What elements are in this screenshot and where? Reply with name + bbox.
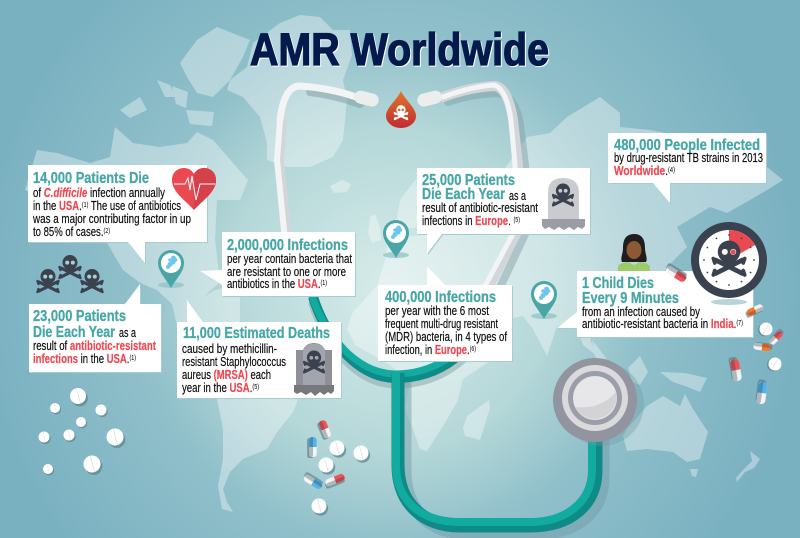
body text: result of antibiotic-resistant xyxy=(422,201,538,215)
body text: of C.difficile infection annually xyxy=(33,186,166,200)
heading: 400,000 Infections xyxy=(385,289,496,306)
body text xyxy=(182,342,286,395)
panel: 23,000 patients die xyxy=(29,284,161,372)
pills: bottom centre xyxy=(303,419,370,516)
heading: 11,000 Estimated Deaths xyxy=(183,325,330,342)
body text: resistant Staphylococcus xyxy=(182,355,286,369)
icon: gravestone xyxy=(294,343,334,396)
icon: heart xyxy=(172,168,216,210)
body text: aureus (MRSA) each xyxy=(182,368,271,382)
body text: (5) xyxy=(252,384,259,391)
teal tubes xyxy=(312,296,596,526)
body text: are resistant to one or more xyxy=(227,265,346,279)
body text: The use of antibiotics xyxy=(88,199,181,213)
body text: infections in Europe. xyxy=(422,214,518,228)
body text xyxy=(614,151,763,178)
map pin: Europe xyxy=(383,220,409,258)
body text: antibiotic-resistant bacteria in India. xyxy=(582,317,744,331)
body text: result of antibiotic-resistant xyxy=(33,339,157,353)
heading: 1 Child Dies xyxy=(582,275,654,292)
body text: as a xyxy=(509,189,526,203)
map pin: India xyxy=(531,281,557,319)
body text: to 85% of cases. xyxy=(33,225,125,239)
pills: right side xyxy=(730,303,784,405)
icon: clock with skull xyxy=(691,222,767,305)
panel: 25,000 patients die xyxy=(417,168,590,254)
body text: frequent multi-drug resistant xyxy=(385,317,498,331)
chestpiece xyxy=(553,358,644,446)
icon: gravestone xyxy=(542,178,585,230)
body text: in the USA. xyxy=(33,199,85,213)
body text: per year contain bacteria that xyxy=(227,252,352,266)
icon: pill on panel xyxy=(665,265,687,283)
white tubes xyxy=(277,85,518,290)
blood drop icon xyxy=(386,91,416,128)
body text: year in the USA. xyxy=(182,381,256,395)
body text: from an infection caused by xyxy=(582,305,701,319)
panel: 14,000 patients die xyxy=(28,165,216,263)
panel: 480,000 people infected xyxy=(608,133,766,203)
body text xyxy=(582,305,743,331)
body text xyxy=(422,189,538,228)
body text: (5) xyxy=(513,217,520,224)
skull group xyxy=(38,255,102,292)
body text: (7) xyxy=(736,320,743,327)
stethoscope xyxy=(277,85,644,533)
heading: 23,000 Patients xyxy=(33,308,126,325)
map pin: USA xyxy=(158,250,184,288)
body text: infections in the USA. xyxy=(33,352,133,366)
heading xyxy=(422,172,515,203)
heading: 14,000 Patients Die xyxy=(33,170,149,187)
body text: infection, in Europe. xyxy=(385,343,478,357)
body text xyxy=(32,186,191,239)
heading: 2,000,000 Infections xyxy=(227,237,348,254)
body text: caused by methicillin- xyxy=(182,342,277,356)
title: AMR Worldwide xyxy=(250,24,549,75)
panel: 11,000 estimated deaths xyxy=(177,300,341,398)
body text: (4) xyxy=(668,167,675,174)
body text xyxy=(33,326,157,366)
body text: Worldwide. xyxy=(614,164,677,178)
body text: (1) xyxy=(82,202,88,209)
heading xyxy=(33,308,126,341)
body text: was a major contributing factor in up xyxy=(32,212,191,226)
ear tips xyxy=(353,89,443,108)
heading: Every 9 Minutes xyxy=(582,290,679,307)
icon: child xyxy=(618,234,650,271)
body text: (MDR) bacteria, in 4 types of xyxy=(385,330,507,344)
body text: (1) xyxy=(320,280,327,287)
heading: 25,000 Patients xyxy=(422,172,515,189)
tube shadows xyxy=(310,92,603,533)
body text: as a xyxy=(119,326,136,340)
panel: 1 child dies xyxy=(557,271,753,337)
heading: Die Each Year xyxy=(33,324,115,341)
heading: Die Each Year xyxy=(422,186,505,203)
body text: (6) xyxy=(470,346,476,353)
body text: per year with the 6 most xyxy=(385,304,489,318)
body text: (1) xyxy=(129,355,136,362)
panel: 400,000 infections xyxy=(378,266,512,361)
heading: 480,000 People Infected xyxy=(614,137,760,154)
body text: (2) xyxy=(103,228,110,235)
body text: antibiotics in the USA. xyxy=(227,277,324,291)
pills: left tablets xyxy=(38,388,125,476)
body text xyxy=(385,304,507,357)
panel: 2,000,000 infections xyxy=(200,232,355,296)
body text xyxy=(227,252,352,291)
heading xyxy=(582,275,679,307)
